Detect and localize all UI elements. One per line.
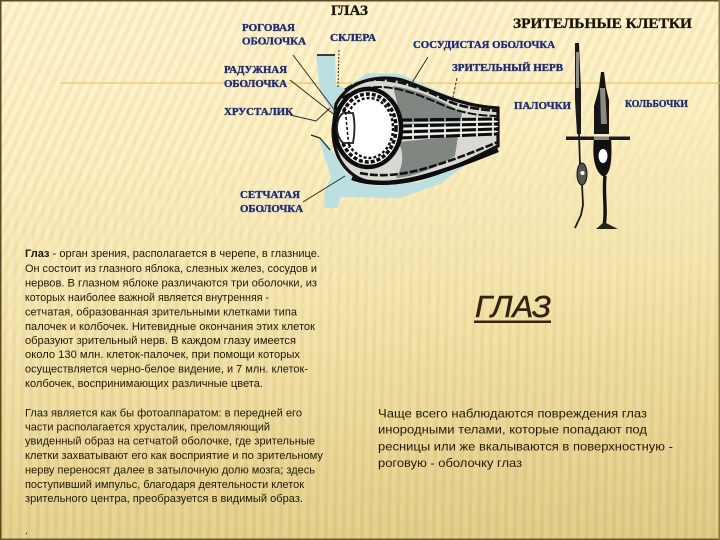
optic nerve [398,119,498,138]
diagram labels: СОСУДИСТАЯ ОБОЛОЧКА [413,40,556,51]
heading: visual cells: ЗРИТЕЛЬНЫЕ КЛЕТКИ [513,16,692,32]
text block: eye as camera [25,408,324,537]
eyeball layers [335,89,401,167]
diagram labels: ПАЛОЧКИ [514,101,571,112]
text block: eye description: которых наиболее важной является внутренняя - [25,292,269,304]
text block: eye injuries [378,406,673,470]
diagram labels [224,23,688,215]
diagram labels: ОБОЛОЧКА [240,204,304,215]
text block: eye description: Он состоит из глазного яблока, слезных желез, сосудов и [25,263,317,275]
shell hatching [345,80,498,111]
diagram labels: РОГОВАЯ [242,23,296,34]
blue orbit tissue [316,55,498,208]
title: ГЛАЗ link: ГЛАЗ [475,289,551,324]
diagram labels: ЗРИТЕЛЬНЫЙ НЕРВ [452,62,563,74]
text block: eye as camera: нерву переносят далее в затылочную долю мозга; здесь [25,464,315,476]
pointer lines [290,50,457,202]
text block: eye injuries: Чаще всего наблюдаются повреждения глаз [378,406,647,420]
diagram labels: КОЛЬБОЧКИ [625,99,688,110]
text block: eye as camera: Глаз является как бы фотоаппаратом: в передней его [25,408,302,420]
membrane bar [566,136,630,140]
text block: eye as camera: увиденный образ на сетчатой оболочке, где зрительные [25,436,315,448]
text block: eye description: образуют зрительный нерв. В каждом глазу имеется [25,335,296,347]
diagram labels: РАДУЖНАЯ [224,65,288,76]
lens [337,113,354,143]
diagram labels: ХРУСТАЛИК [224,107,294,118]
diagram labels: ОБОЛОЧКА [224,79,288,90]
rod cell [575,43,587,228]
text block: eye injuries: роговую - оболочку глаз [378,456,522,470]
text block: eye description: Глаз - орган зрения, располагается в черепе, в глазнице. [25,248,320,260]
text block: eye as camera: клетки захватывают его как восприятие и по зрительному [25,450,324,462]
text block: eye description: около 130 млн. клеток-палочек, при помощи которых [25,349,301,361]
diagram labels: СЕТЧАТАЯ [240,190,301,201]
heading: eye: ГЛАЗ [331,3,368,19]
text block: eye description: колбочек, воспринимающих различные цвета. [25,378,263,390]
text block: eye description: сетчатая, образованная зрительными клетками типа [25,306,297,318]
text block: eye description: нервов. В глазном яблоке различаются три оболочки, из [25,278,317,290]
visual cells diagram [566,43,630,229]
text block: eye as camera: части располагается хрусталик, преломляющий [25,422,270,434]
text block: eye injuries: ресницы или же вкалываются в поверхностную - [378,440,673,454]
text block: eye description: осуществляется черно-белое видение, и 7 млн. клеток- [25,364,308,376]
text block: eye as camera: зрительного центра, преобразуется в видимый образ. [25,493,303,505]
text block: eye description: палочек и колбочек. Нитевидные окончания этих клеток [25,321,315,333]
eye diagram [290,50,498,208]
diagram labels: СКЛЕРА [330,33,377,44]
text block: eye description [25,248,320,390]
cone cell [593,72,618,229]
text block: eye as camera: . [25,525,28,537]
diagram labels: ОБОЛОЧКА [242,36,307,48]
text block: eye injuries: инородными телами, которые попадают под [378,422,647,436]
eye muscles [393,86,462,126]
eyeball outer shell [333,78,498,183]
text block: eye as camera: поступивший импульс, благодаря деятельности клеток [25,479,304,491]
